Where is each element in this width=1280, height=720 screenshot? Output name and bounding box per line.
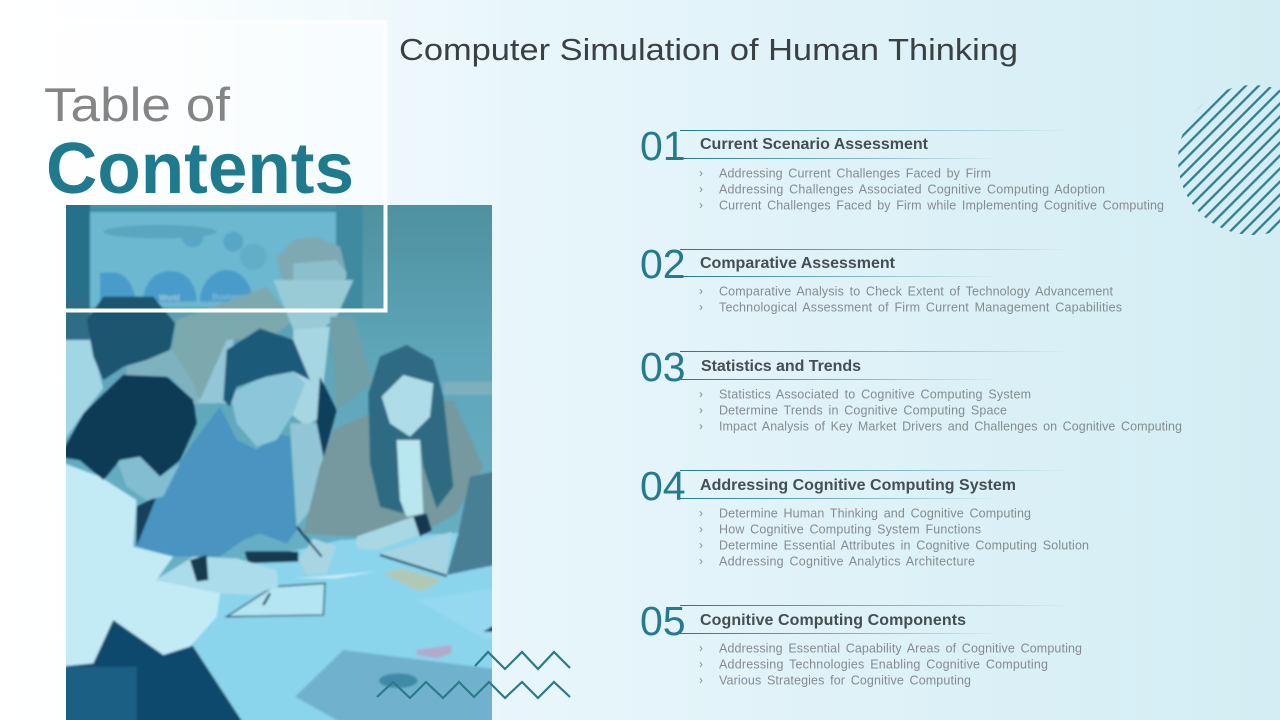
section 01: Addressing Current Challenges Faced by Firm xyxy=(719,166,991,180)
section 02: › xyxy=(699,300,703,314)
section 01: 01 xyxy=(640,123,686,169)
section 04: How Cognitive Computing System Functions xyxy=(719,522,981,536)
section 01: › xyxy=(699,166,703,180)
photo: team around a table xyxy=(57,197,503,720)
heading: Table of: Table of xyxy=(44,78,231,131)
section 03: Statistics and Trends xyxy=(701,358,861,375)
section 05: › xyxy=(699,657,703,671)
section 05: › xyxy=(699,641,703,655)
section 02: Comparative Assessment xyxy=(700,255,896,272)
right laptop xyxy=(380,532,452,575)
front man xyxy=(60,462,220,667)
section 05: Addressing Essential Capability Areas of Cognitive Computing xyxy=(719,642,1082,656)
section 04: 04 xyxy=(640,463,686,509)
section 04: › xyxy=(699,506,703,520)
section 01: Addressing Challenges Associated Cognitive Computing Adoption xyxy=(719,182,1105,196)
section 03: › xyxy=(699,403,703,417)
section 03: › xyxy=(699,387,703,401)
section 01: › xyxy=(699,182,703,196)
section 03: Determine Trends in Cognitive Computing Space xyxy=(719,404,1007,418)
section 02: Comparative Analysis to Check Extent of Technology Advancement xyxy=(719,284,1114,298)
section 02: › xyxy=(699,284,703,298)
photo: team around a table: World xyxy=(159,294,180,303)
title: Computer Simulation of Human Thinking xyxy=(399,32,1018,67)
section 01: › xyxy=(699,198,703,212)
icon: zigzag lines xyxy=(377,652,570,698)
section 02: Technological Assessment of Firm Current Management Capabilities xyxy=(719,300,1122,314)
section 04: Determine Human Thinking and Cognitive Computing xyxy=(719,506,1031,520)
section 04 xyxy=(640,463,1089,568)
back woman xyxy=(170,287,293,400)
section 04: Addressing Cognitive Computing System xyxy=(700,477,1016,494)
section 05: › xyxy=(699,673,703,687)
table objects xyxy=(245,552,298,563)
photo: team around a table: Business xyxy=(212,293,244,302)
section 05: Addressing Technologies Enabling Cognitive Computing xyxy=(719,658,1048,672)
section 05 xyxy=(640,598,1082,688)
white window frame xyxy=(28,22,386,310)
right woman xyxy=(303,400,483,537)
heading: Contents: Contents xyxy=(46,129,354,209)
section 03: Impact Analysis of Key Market Drivers and Challenges on Cognitive Computing xyxy=(719,420,1182,434)
section 05: 05 xyxy=(640,598,686,644)
section 05: Cognitive Computing Components xyxy=(700,612,966,629)
section 04: › xyxy=(699,538,703,552)
section 04: › xyxy=(699,554,703,568)
section 03: › xyxy=(699,419,703,433)
section 01 xyxy=(640,123,1164,212)
section 02: 02 xyxy=(640,241,686,287)
table xyxy=(153,530,503,720)
section 03: Statistics Associated to Cognitive Computing System xyxy=(719,388,1031,402)
translucent window panel xyxy=(26,20,387,205)
section 03 xyxy=(640,344,1182,434)
section 05: Various Strategies for Cognitive Computing xyxy=(719,674,971,688)
section 04: Determine Essential Attributes in Cognitive Computing Solution xyxy=(719,538,1089,552)
section 01: Current Challenges Faced by Firm while Implementing Cognitive Computing xyxy=(719,198,1164,212)
section 03: 03 xyxy=(640,344,686,390)
middle man xyxy=(137,407,297,557)
icon: striped circle xyxy=(1178,85,1280,235)
section 01: Current Scenario Assessment xyxy=(700,136,929,153)
section 02 xyxy=(640,241,1122,314)
back-left man xyxy=(66,338,104,440)
section 04: Addressing Cognitive Analytics Architecture xyxy=(719,554,975,568)
section 04: › xyxy=(699,522,703,536)
wall details xyxy=(193,337,233,403)
